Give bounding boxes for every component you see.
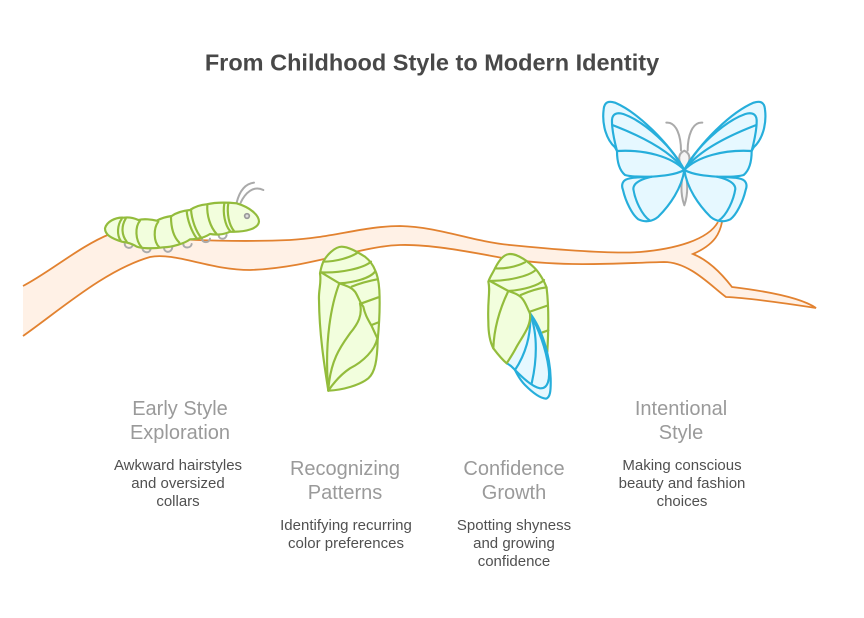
label: Early Style Exploration: Early Style: [132, 398, 228, 420]
label: Intentional Style: beauty and fashion: [619, 475, 745, 492]
icon: chrysalis: [319, 247, 380, 391]
label: Recognizing Patterns: [280, 458, 412, 552]
label: Intentional Style: Intentional: [635, 398, 727, 420]
label: Recognizing Patterns: Identifying recurring: [280, 517, 412, 534]
label: Recognizing Patterns: color preferences: [288, 535, 404, 552]
label: Recognizing Patterns: Recognizing: [290, 458, 400, 480]
icon: caterpillar: [105, 183, 263, 252]
label: Early Style Exploration: Exploration: [130, 422, 230, 444]
label: Confidence Growth: and growing: [473, 535, 555, 552]
title: From Childhood Style to Modern Identity: [205, 50, 659, 76]
butterfly wings: [603, 102, 765, 221]
label: Early Style Exploration: Awkward hairstyles: [114, 457, 242, 474]
label: Early Style Exploration: and oversized: [131, 475, 225, 492]
label: Early Style Exploration: [114, 398, 242, 510]
label: Confidence Growth: Confidence: [463, 458, 565, 480]
label: Intentional Style: Style: [659, 422, 703, 444]
label: Confidence Growth: Growth: [482, 482, 546, 504]
label: Confidence Growth: Spotting shyness: [457, 517, 571, 534]
branch: [23, 222, 816, 336]
icon: butterfly: [603, 102, 765, 221]
label: Confidence Growth: [457, 458, 571, 570]
label: Intentional Style: [619, 398, 745, 510]
label: Recognizing Patterns: Patterns: [308, 482, 382, 504]
butterfly body and antennae: [666, 123, 702, 205]
label: Confidence Growth: confidence: [478, 553, 550, 570]
label: Intentional Style: Making conscious: [622, 457, 742, 474]
label: Intentional Style: choices: [657, 493, 707, 510]
label: Early Style Exploration: collars: [156, 493, 200, 510]
icon: emerging chrysalis: [488, 254, 551, 399]
